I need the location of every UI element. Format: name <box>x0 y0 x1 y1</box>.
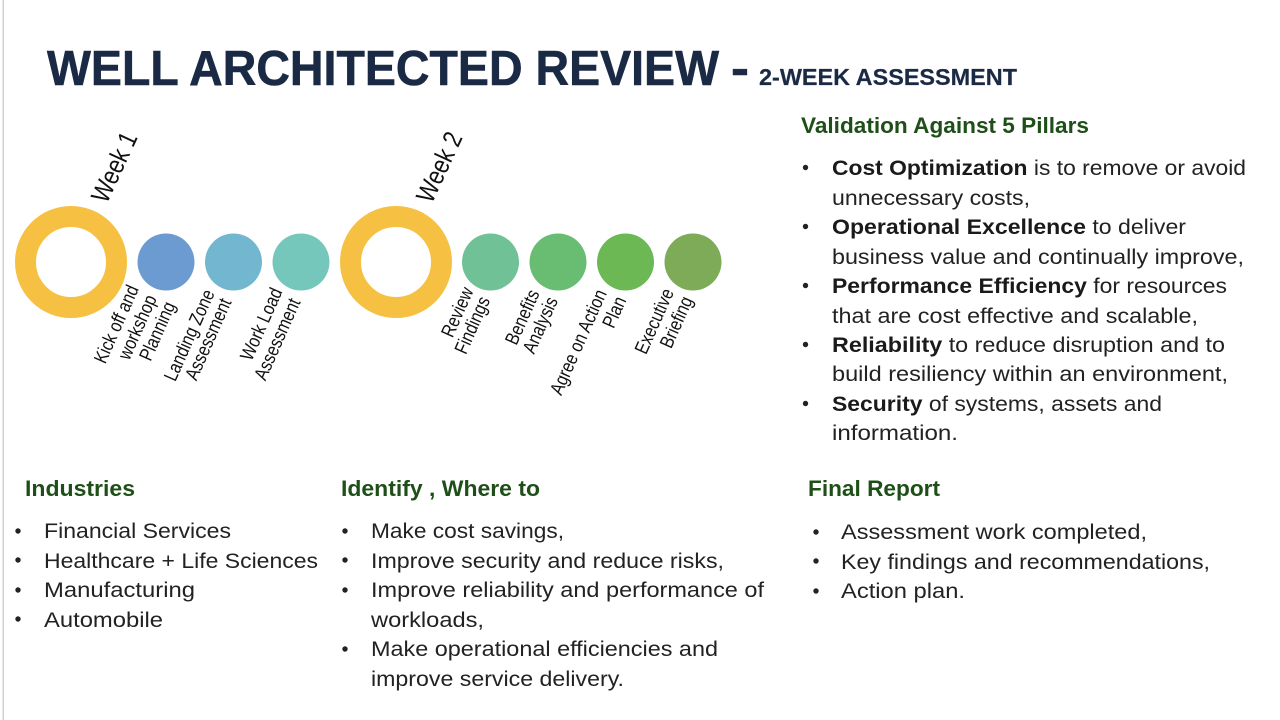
list: identify: Improve security and reduce risks, <box>371 549 724 573</box>
heading: final report: Final Report <box>808 476 941 501</box>
list: pillars: Operational Excellence to deliver <box>832 215 1186 239</box>
heading: identify: Identify , Where to <box>341 476 540 501</box>
list: identify: Make operational efficiencies and <box>371 637 718 661</box>
list: pillars <box>803 156 1246 445</box>
list: final report: Action plan. <box>841 579 965 603</box>
list: industries: Automobile <box>44 608 163 632</box>
list: final report: Assessment work completed, <box>841 520 1147 544</box>
step: kick off and workshop planning <box>89 234 194 367</box>
list: pillars: unnecessary costs, <box>832 186 1030 210</box>
icon: week 2 ring <box>350 216 442 308</box>
step: review findings <box>437 234 519 357</box>
heading: validation: Validation Against 5 Pillars <box>801 113 1089 138</box>
panel: final report <box>808 476 1210 603</box>
week 1 label: Week 1 <box>86 128 144 207</box>
title: WELL ARCHITECTED REVIEW <box>47 42 720 96</box>
timeline: week 1 <box>26 128 330 384</box>
list: pillars: Cost Optimization is to remove or avoid <box>832 156 1246 180</box>
step: work load assessment <box>236 234 330 383</box>
list: pillars: information. <box>832 421 958 445</box>
list: final report <box>813 520 1210 603</box>
step: work load assessment: Work Load <box>236 284 287 364</box>
step: landing zone assessment: Assessment <box>181 295 236 383</box>
list: industries: Manufacturing <box>44 578 195 602</box>
step: landing zone assessment: Landing Zone <box>159 286 219 384</box>
list: industries: Healthcare + Life Sciences <box>44 549 318 573</box>
list: final report: Key findings and recommendations, <box>841 550 1210 574</box>
step: kick off and workshop planning: workshop <box>113 291 161 364</box>
step: benefits analysis: Analysis <box>518 293 562 357</box>
step: executive briefing: Briefing <box>655 293 697 351</box>
list: pillars: Reliability to reduce disruption and to <box>832 333 1225 357</box>
icon: week 1 ring <box>26 216 116 308</box>
step: agree on action plan: Plan <box>598 293 631 331</box>
panel: validation against 5 pillars <box>801 113 1246 445</box>
step: agree on action plan <box>545 234 654 398</box>
week 2 label: Week 2 <box>411 128 469 207</box>
list: pillars: that are cost effective and scalable, <box>832 304 1198 328</box>
title: - <box>731 42 749 96</box>
list: industries <box>15 519 318 632</box>
step: agree on action plan: Agree on Action <box>545 286 611 398</box>
panel: identify where to <box>341 476 764 691</box>
list: identify: Make cost savings, <box>371 519 564 543</box>
panel: industries <box>15 476 318 632</box>
heading: industries: Industries <box>25 476 135 501</box>
step: executive briefing: Executive <box>630 285 678 357</box>
title: 2-WEEK ASSESSMENT <box>759 64 1017 90</box>
list: pillars: Performance Efficiency for resources <box>832 274 1227 298</box>
step: benefits analysis: Benefits <box>501 286 544 348</box>
list: identify: workloads, <box>370 608 484 632</box>
step: kick off and workshop planning: Planning <box>135 298 180 364</box>
step: review findings: Findings <box>450 293 494 357</box>
step: executive briefing <box>630 234 722 357</box>
step: kick off and workshop planning: Kick off and <box>89 282 143 367</box>
list: pillars: business value and continually improve, <box>832 245 1244 269</box>
list: identify: improve service delivery. <box>371 667 624 691</box>
step: work load assessment: Assessment <box>250 295 305 383</box>
timeline: week 2 <box>350 128 722 398</box>
step: landing zone assessment <box>159 234 262 384</box>
list: industries: Financial Services <box>44 519 231 543</box>
list: pillars: build resiliency within an environment, <box>832 362 1228 386</box>
step: benefits analysis <box>501 234 586 357</box>
list: pillars: Security of systems, assets and <box>832 392 1162 416</box>
list: identify <box>342 519 764 691</box>
list: identify: Improve reliability and performance of <box>371 578 764 602</box>
step: review findings: Review <box>437 284 478 340</box>
